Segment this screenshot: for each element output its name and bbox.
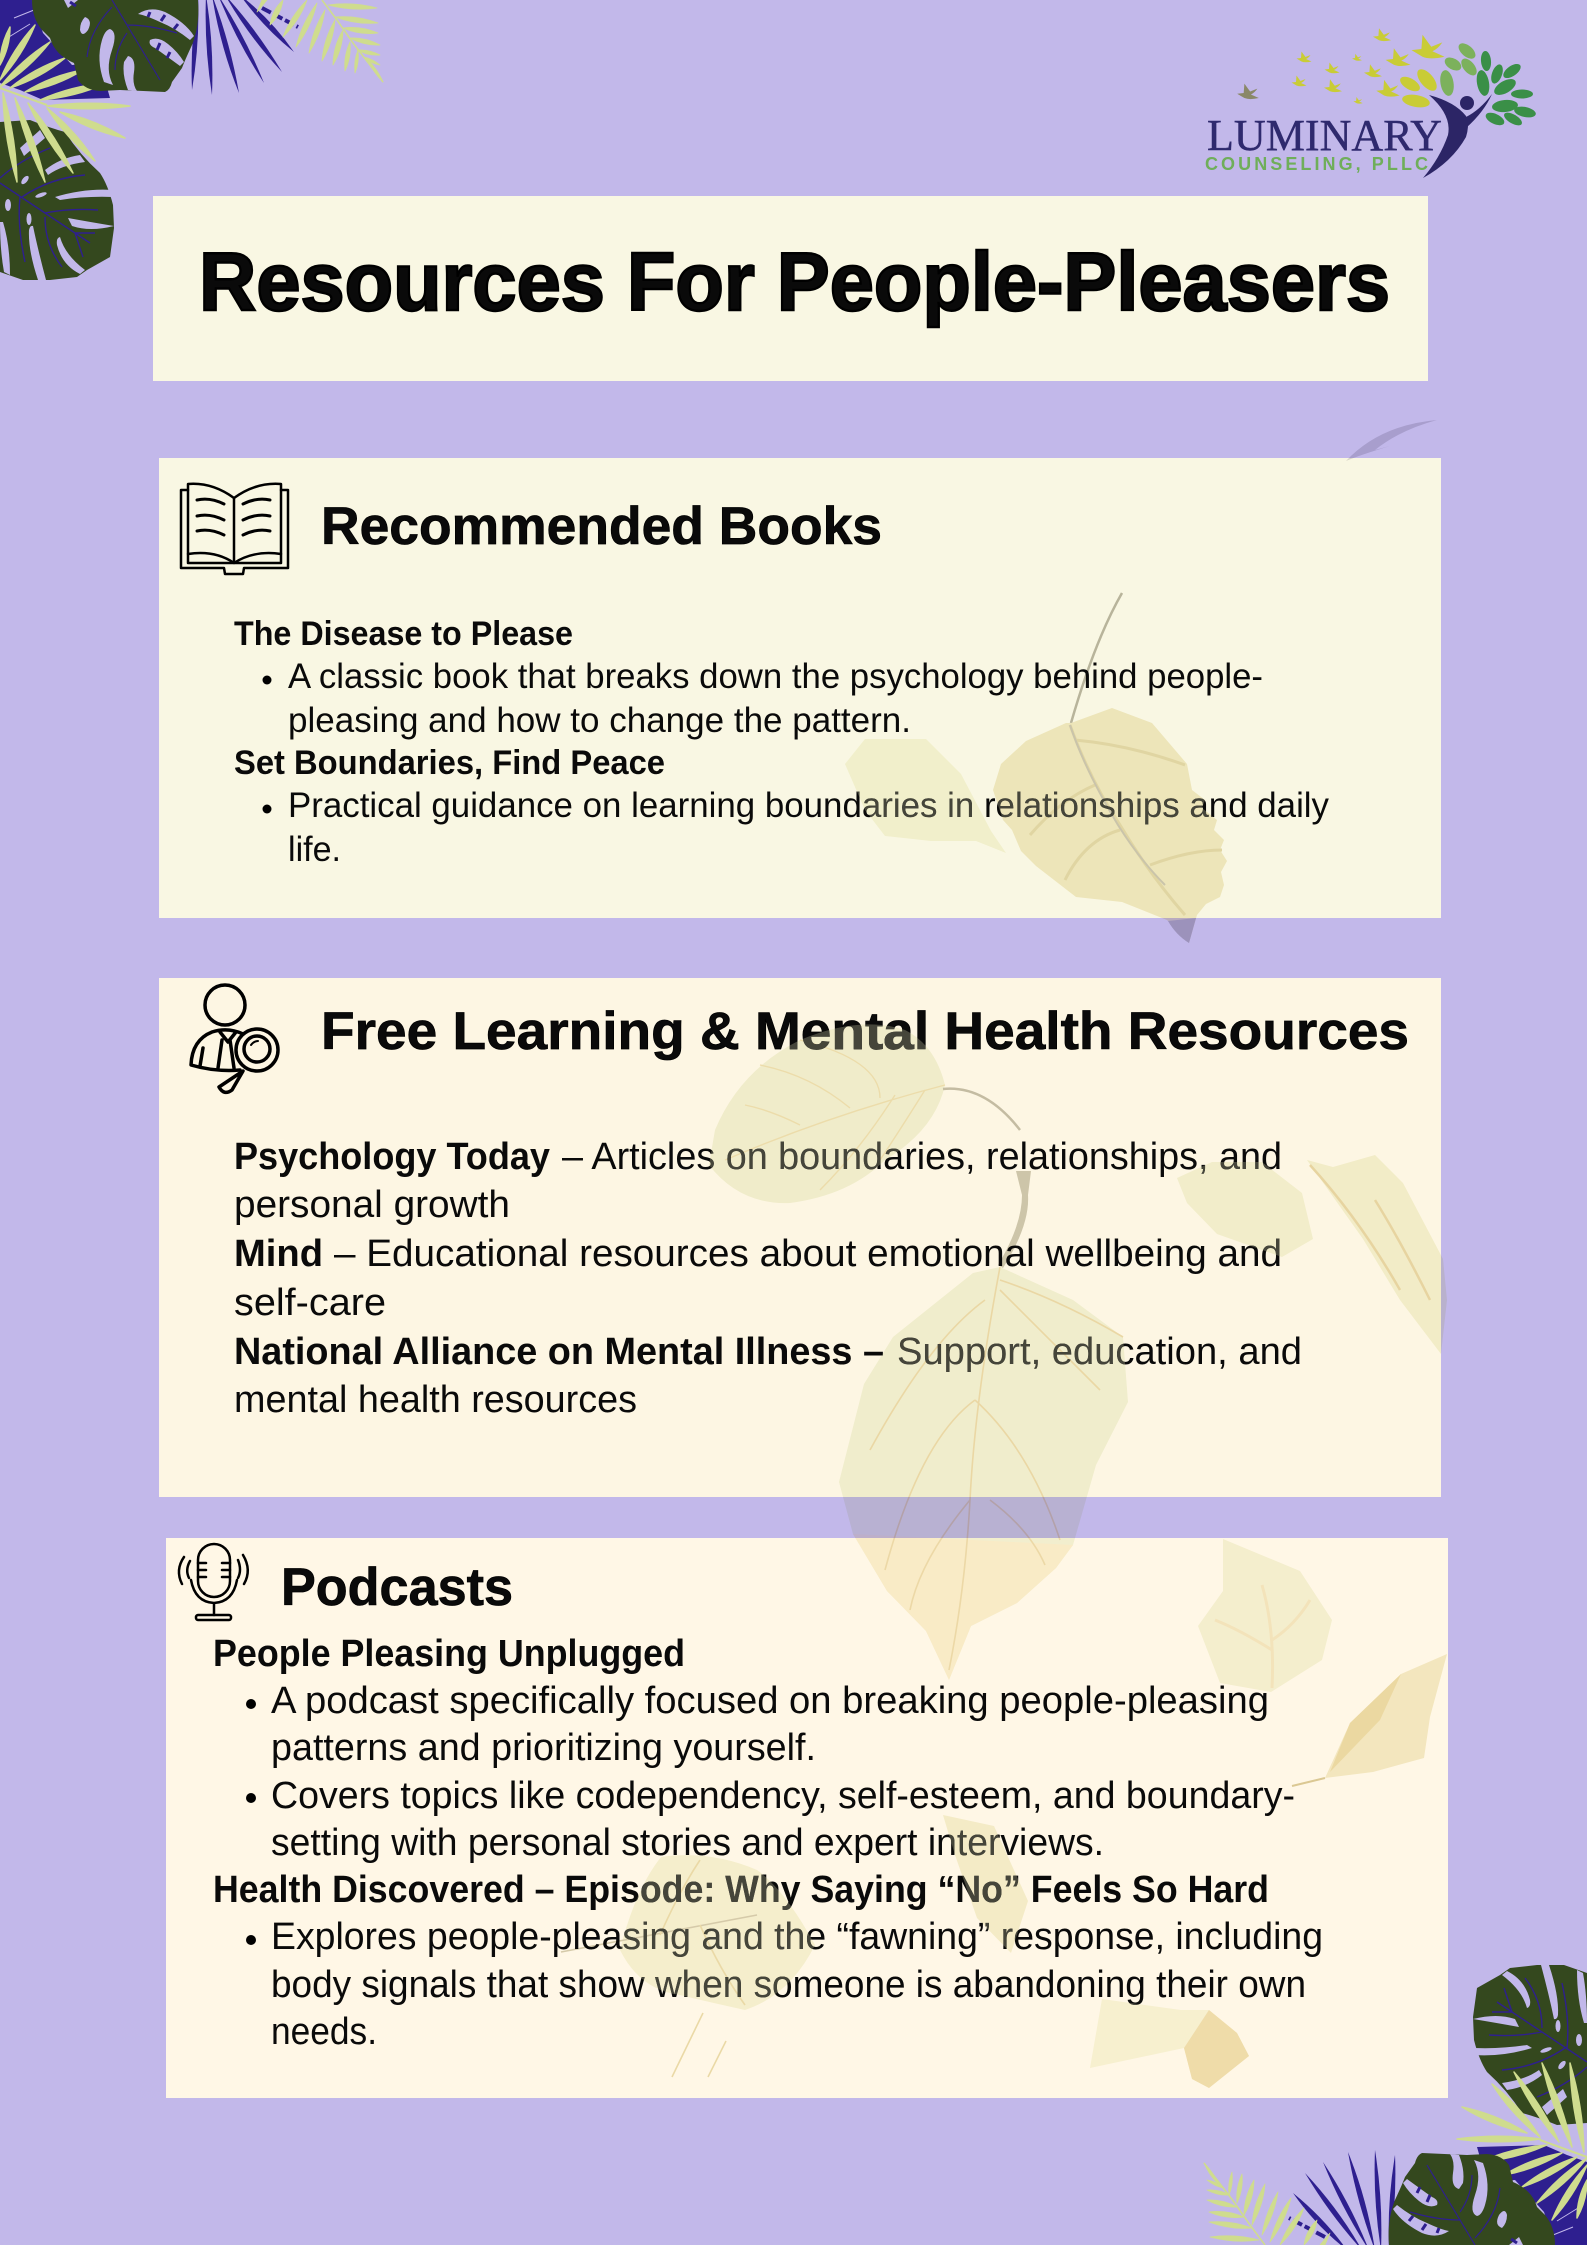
leaf: free big [839, 1171, 1128, 1680]
podcast list: A podcast specifically focused on breaking people-pleasing [271, 1680, 1269, 1722]
leaf overlays [561, 420, 1447, 2088]
leaf: books large [993, 593, 1227, 943]
heading: podcasts: Podcasts [281, 1558, 513, 1617]
book list: Practical guidance on learning boundaries in relationships and daily [288, 786, 1329, 825]
icon: person with magnifier [191, 985, 278, 1092]
leaf: podcast bottom [1090, 1999, 1249, 2088]
logo: Luminary Counseling: COUNSELING, PLLC [1205, 154, 1428, 174]
heading: recommended books: Recommended Books [321, 497, 882, 556]
book list: A classic book that breaks down the psychology behind people- [288, 657, 1263, 696]
resource list: self-care [234, 1282, 386, 1324]
heading: free learning: Free Learning & Mental Health Resources [321, 1002, 1409, 1061]
logo: Luminary Counseling: LUMINARY [1207, 111, 1442, 160]
resource list: personal growth [234, 1184, 510, 1226]
leaf: podcast right [1292, 1654, 1447, 1786]
book list: Set Boundaries, Find Peace [234, 744, 665, 782]
podcast list [213, 1633, 1323, 2053]
panel: podcasts [166, 1538, 1448, 2098]
book list [234, 615, 1329, 869]
leaf: podcast round [1198, 1539, 1332, 1692]
resource list: Support, education, and [897, 1331, 1302, 1373]
podcast list: Explores people-pleasing and the “fawning” response, including [271, 1916, 1323, 1958]
podcast list: Health Discovered – Episode: Why Saying “No” Feels So Hard [213, 1869, 1269, 1911]
leaf: free small petal [1177, 1162, 1313, 1257]
leaf veil dimming the text beneath the leaves [620, 708, 1447, 2088]
leaf: free torn [1307, 1155, 1447, 1354]
podcast list: patterns and prioritizing yourself. [271, 1727, 816, 1769]
leaf: free top [709, 1024, 1020, 1203]
resource list: – Educational resources about emotional wellbeing and [334, 1233, 1282, 1275]
resource list: Psychology Today [234, 1136, 550, 1178]
resource list: Mind [234, 1233, 323, 1275]
decoration: tropical leaves top-left [0, 0, 383, 280]
podcast list: body signals that show when someone is abandoning their own [271, 1964, 1306, 2006]
podcast list: Covers topics like codependency, self-esteem, and boundary- [271, 1775, 1295, 1817]
panel: title [153, 196, 1428, 381]
resource list: National Alliance on Mental Illness – [234, 1331, 884, 1373]
podcast list: needs. [271, 2011, 377, 2053]
icon: microphone [179, 1544, 248, 1620]
book list: The Disease to Please [234, 615, 573, 653]
panel: free learning and mental health resources [159, 978, 1441, 1497]
podcast list: People Pleasing Unplugged [213, 1633, 685, 1675]
leaf: books petal [845, 739, 1006, 853]
title: Resources For People-Pleasers [199, 235, 1390, 328]
podcast list: setting with personal stories and expert interviews. [271, 1822, 1104, 1864]
resource list [234, 1136, 1302, 1421]
resource list: mental health resources [234, 1379, 637, 1421]
leaf: top wisp [1346, 420, 1437, 461]
leaf: podcast small middle [943, 1815, 1028, 1953]
book list: pleasing and how to change the pattern. [288, 701, 911, 740]
decoration: tropical leaves bottom-right [1204, 1965, 1587, 2245]
leaf: podcast left [561, 1855, 815, 2077]
panel: recommended books [159, 458, 1441, 918]
resource list: – Articles on boundaries, relationships, and [562, 1136, 1282, 1178]
icon: open book [181, 484, 288, 574]
book list: life. [288, 830, 341, 869]
logo: Luminary Counseling [1205, 28, 1537, 178]
